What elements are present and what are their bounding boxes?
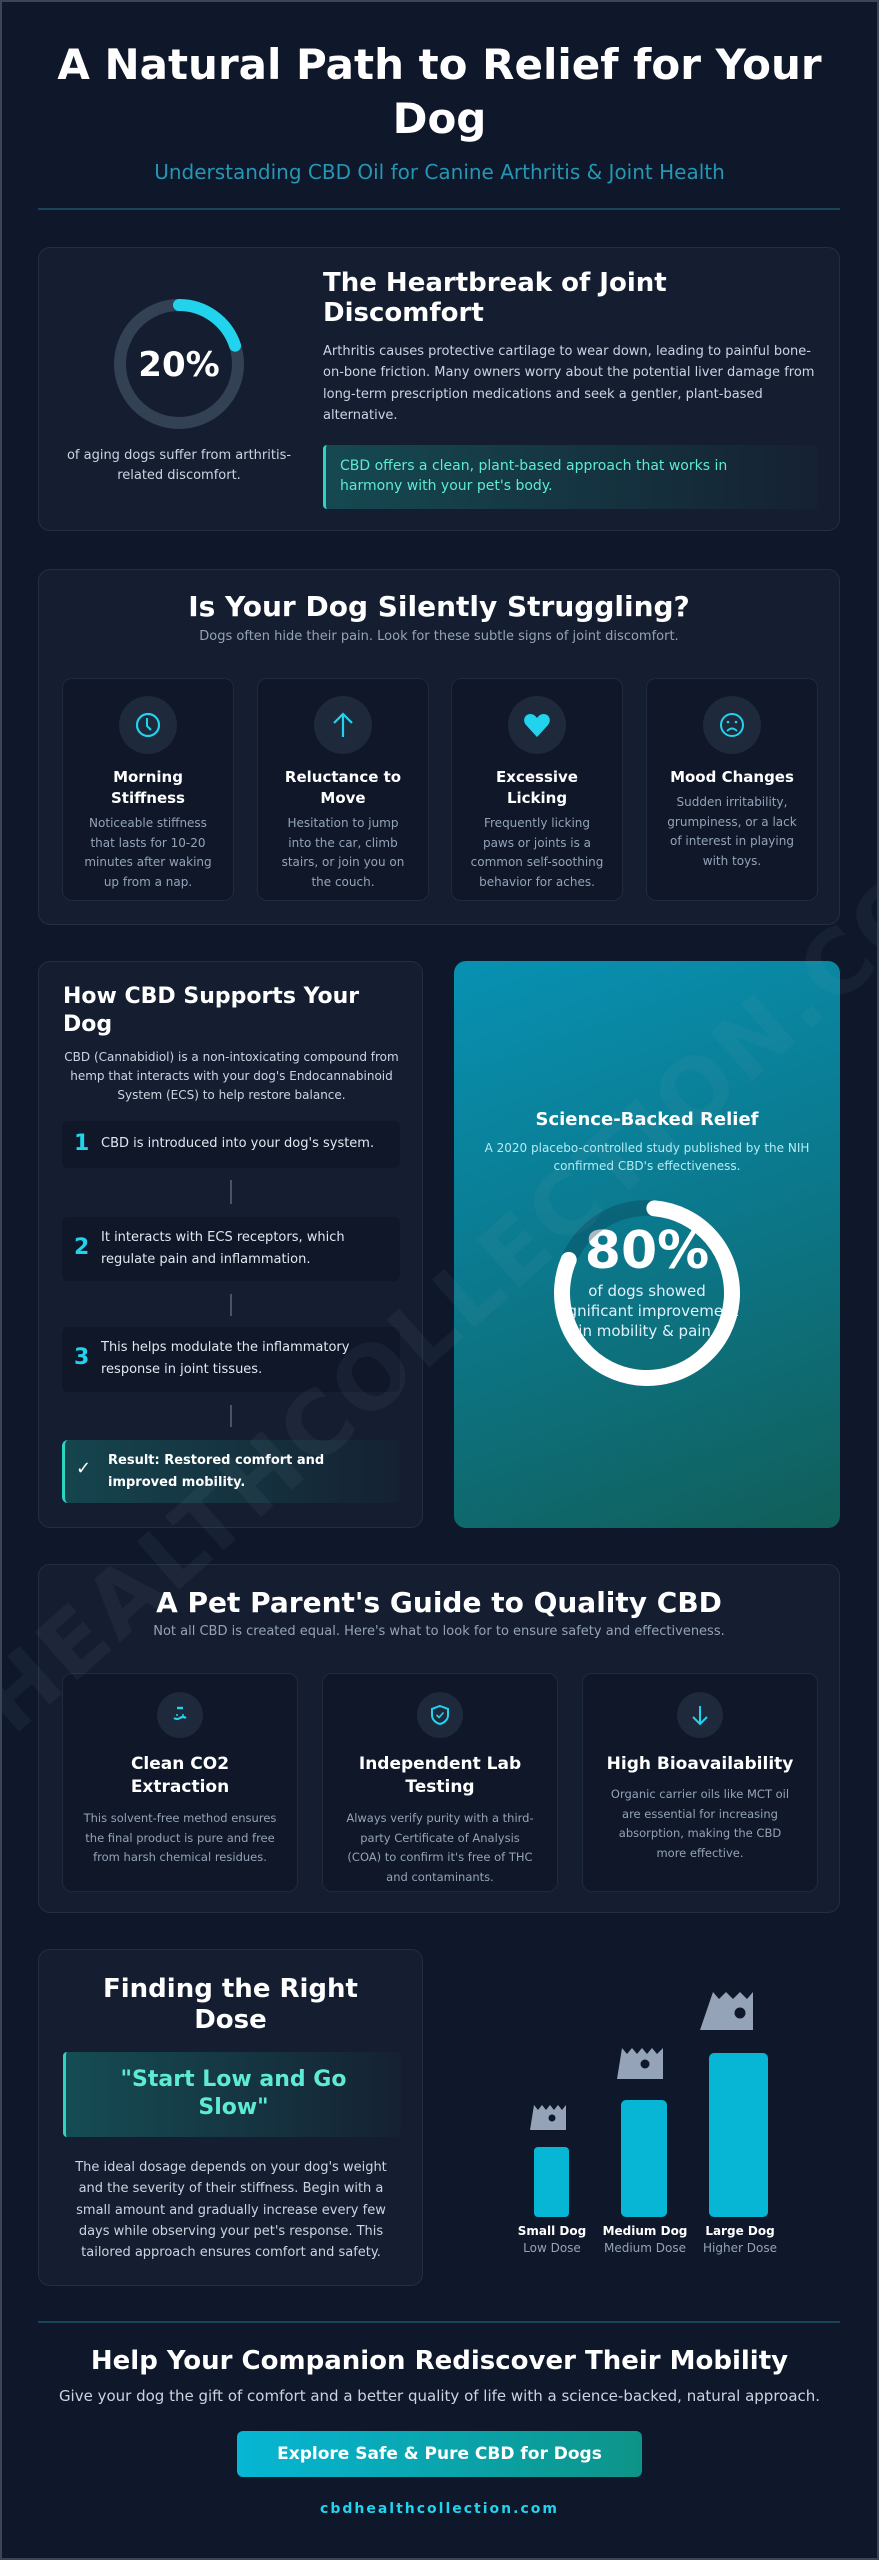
card: morning stiffness <box>62 678 234 901</box>
card: morning stiffness: Stiffness <box>111 789 185 807</box>
icon: clock <box>119 696 177 754</box>
card: CO2: Extraction <box>131 1777 229 1797</box>
card: morning stiffness: Noticeable stiffness that lasts for 10-20 minutes after waking up from a nap. <box>84 816 212 888</box>
stat caption: of aging dogs suffer from arthritis-related discomfort. <box>67 448 291 483</box>
ring chart 80% <box>554 1200 740 1386</box>
bar chart: dosage by dog size: Small Dog <box>518 2224 586 2238</box>
bar chart: dosage by dog size: Higher Dose <box>703 2241 777 2255</box>
icon: up arrow <box>314 696 372 754</box>
card: lab testing: Testing <box>405 1777 475 1797</box>
bar chart: dosage by dog size: Medium Dose <box>604 2241 686 2255</box>
result box <box>62 1440 400 1503</box>
step 1: 1 <box>74 1131 89 1156</box>
step 3 <box>62 1327 400 1392</box>
card: mood: Sudden irritability, grumpiness, or a lack of interest in playing with toys. <box>667 795 797 868</box>
step 2: It interacts with ECS receptors, which regulate pain and inflammation. <box>101 1230 345 1267</box>
bar chart: dosage by dog size: Large Dog <box>705 2224 775 2238</box>
panel: science backed: of dogs showed <box>588 1282 706 1300</box>
card: lab testing <box>322 1673 558 1892</box>
card: licking: Licking <box>507 789 567 807</box>
subheading: Dogs often hide their pain. Look for these subtle signs of joint discomfort. <box>199 629 679 644</box>
website url: cbdhealthcollection.com <box>320 2501 559 2517</box>
icon: down arrow <box>677 1692 723 1738</box>
heading: A Pet Parent's Guide to Quality CBD <box>156 1586 722 1619</box>
icon: heart <box>508 696 566 754</box>
card: morning stiffness: Morning <box>113 768 183 786</box>
heading: Dose <box>194 2005 267 2035</box>
small <box>530 2105 566 2130</box>
CTA button: Explore Safe & Pure CBD for Dogs <box>277 2444 602 2464</box>
study text: A 2020 placebo-controlled study published by the NIH confirmed CBD's effectiveness. <box>485 1141 809 1173</box>
quote box <box>63 2052 401 2137</box>
large <box>700 1992 753 2030</box>
ring chart 20%: 20% <box>138 345 220 385</box>
card: reluctance: Hesitation to jump into the car, climb stairs, or join you on the couch. <box>282 816 404 888</box>
heading: How CBD Supports Your Dog <box>63 984 359 1037</box>
callout: CBD offers a clean, plant-based approach that works in harmony with your pet's body. <box>340 458 727 494</box>
subtitle: Understanding CBD Oil for Canine Arthritis & Joint Health <box>154 160 725 184</box>
panel: science backed: significant improvement <box>556 1302 738 1320</box>
quote box: Slow" <box>198 2095 269 2120</box>
step 2: 2 <box>74 1235 89 1260</box>
ring chart 20% <box>114 299 244 429</box>
card: licking: Frequently licking paws or joints is a common self-soothing behavior for aches. <box>471 816 603 888</box>
card: lab testing: Always verify purity with a third-party Certificate of Analysis (COA) to confirm it's free of THC and contaminants. <box>346 1811 534 1884</box>
card: CO2: This solvent-free method ensures the final product is pure and free from harsh chemical residues. <box>84 1811 276 1864</box>
heading <box>103 1974 358 2035</box>
medium <box>617 2048 663 2079</box>
panel: science backed <box>454 961 840 1528</box>
heading: Finding the Right <box>103 1974 358 2004</box>
result box: ✓ <box>76 1458 91 1479</box>
card: bioavailability: Organic carrier oils like MCT oil are essential for increasing absorption, making the CBD more effective. <box>611 1787 789 1860</box>
card: CO2: Clean CO2 <box>131 1754 229 1774</box>
panel: dosing <box>38 1949 423 2286</box>
panel: how CBD works <box>38 961 423 1528</box>
step 1: CBD is introduced into your dog's system. <box>101 1136 374 1151</box>
card: lab testing: Independent Lab <box>359 1754 521 1774</box>
intro text: CBD (Cannabidiol) is a non-intoxicating compound from hemp that interacts with your dog's Endocannabinoid System (ECS) to help restore balance. <box>64 1050 399 1102</box>
callout <box>323 445 819 509</box>
result box: Result: Restored comfort and improved mobility. <box>108 1453 324 1490</box>
bar chart: dosage by dog size <box>518 1992 777 2255</box>
paragraph: The ideal dosage depends on your dog's weight and the severity of their stiffness. Begin with a small amount and gradually increase every few days while observing your pet's response. This tailored approach ensures comfort and safety. <box>75 2160 387 2260</box>
panel: science backed: in mobility & pain. <box>578 1322 716 1340</box>
step 2 <box>62 1217 400 1281</box>
card: reluctance: Reluctance to <box>285 768 401 786</box>
card: licking: Excessive <box>496 768 578 786</box>
panel: heartbreak <box>38 247 840 531</box>
card: bioavailability: High Bioavailability <box>607 1754 793 1774</box>
CTA text: Give your dog the gift of comfort and a better quality of life with a science-backed, natural approach. <box>59 2387 820 2405</box>
stat text: 80% <box>585 1221 709 1281</box>
card: bioavailability <box>582 1673 818 1892</box>
icon: shield <box>417 1692 463 1738</box>
heading: The Heartbreak of Joint Discomfort <box>323 268 667 328</box>
icon: waves <box>157 1692 203 1738</box>
CTA button <box>237 2431 642 2477</box>
card: mood: Mood Changes <box>670 768 794 786</box>
step 1 <box>62 1121 400 1168</box>
card: mood <box>646 678 818 901</box>
card: reluctance: Move <box>320 789 366 807</box>
title: A Natural Path to Relief for Your Dog <box>57 40 822 143</box>
card: licking <box>451 678 623 901</box>
panel: quality guide <box>38 1564 840 1913</box>
step 3: This helps modulate the inflammatory response in joint tissues. <box>101 1340 349 1377</box>
quote box: "Start Low and Go <box>121 2067 346 2092</box>
CTA heading: Help Your Companion Rediscover Their Mobility <box>91 2346 788 2376</box>
paragraph: Arthritis causes protective cartilage to wear down, leading to painful bone-on-bone friction. Many owners worry about the potential liver damage from long-term prescription medications and seek a gentler, plant-based alternative. <box>323 344 814 423</box>
panel: silent struggles <box>38 569 840 925</box>
card: CO2 <box>62 1673 298 1892</box>
step 3: 3 <box>74 1345 89 1370</box>
heading: Is Your Dog Silently Struggling? <box>188 590 690 623</box>
bar chart: dosage by dog size: Low Dose <box>523 2241 581 2255</box>
card: reluctance <box>257 678 429 901</box>
icon: frown <box>703 696 761 754</box>
subheading: Not all CBD is created equal. Here's what to look for to ensure safety and effectiveness. <box>153 1624 725 1639</box>
bar chart: dosage by dog size: Medium Dog <box>603 2224 687 2238</box>
heading: Science-Backed Relief <box>535 1109 758 1130</box>
